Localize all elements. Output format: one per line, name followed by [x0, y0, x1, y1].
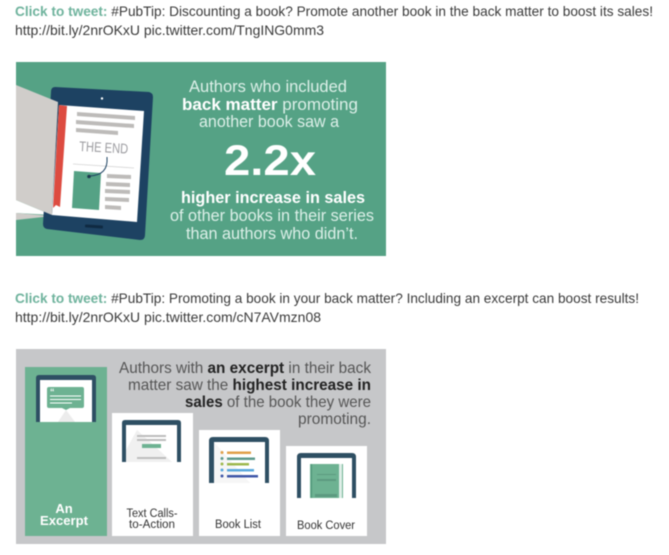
- card: text calls-to-action: [112, 413, 193, 536]
- label: an excerpt: An: [55, 501, 73, 516]
- heading text: sales of the book they were: [185, 394, 371, 411]
- statistic text: another book saw a: [199, 112, 340, 131]
- illustration: tablet with open book cover: [16, 85, 153, 240]
- statistic text: 2.2x: [224, 137, 316, 185]
- heading text: [119, 360, 372, 428]
- card: an excerpt: [25, 367, 107, 536]
- tweet text 2: http://bit.ly/2nrOKxU pic.twitter.com/cN7AVmzn08: [15, 310, 321, 325]
- heading text: promoting.: [298, 411, 371, 428]
- label: text calls-to-action: Text Calls-: [126, 508, 178, 520]
- card: book list: [199, 430, 280, 536]
- statistic text: higher increase in sales: [181, 188, 365, 207]
- statistic text: Authors who included: [189, 77, 347, 96]
- heading text: Authors with an excerpt in their back: [119, 360, 372, 377]
- label: book cover: Book Cover: [297, 520, 355, 532]
- arrow: [90, 157, 107, 176]
- statistic text: back matter promoting: [182, 95, 358, 114]
- card: book cover: [286, 446, 367, 536]
- tweet text 1: http://bit.ly/2nrOKxU pic.twitter.com/TngING0mm3: [15, 23, 324, 38]
- tweet text 1: Click to tweet: #PubTip: Discounting a book? Promote another book in the back matter to boost its sales!: [15, 4, 653, 19]
- card: text calls-to-action: to-Action: [129, 519, 175, 531]
- panel: excerpt comparison: [16, 349, 386, 544]
- card: an excerpt: “: [50, 387, 54, 397]
- label: book list: Book List: [215, 519, 262, 531]
- tweet text 2: [15, 291, 639, 325]
- label: the end: THE END: [79, 138, 129, 157]
- statistic text: than authors who didn’t.: [186, 224, 358, 243]
- card: an excerpt: Excerpt: [40, 513, 89, 528]
- statistic text: [170, 77, 374, 243]
- heading text: matter saw the highest increase in: [128, 377, 371, 394]
- panel: back matter statistic: [16, 62, 386, 256]
- tweet text 1: [15, 4, 653, 38]
- statistic text: of other books in their series: [170, 206, 374, 225]
- tweet text 2: Click to tweet: #PubTip: Promoting a book in your back matter? Including an excerpt can boost results!: [15, 291, 639, 306]
